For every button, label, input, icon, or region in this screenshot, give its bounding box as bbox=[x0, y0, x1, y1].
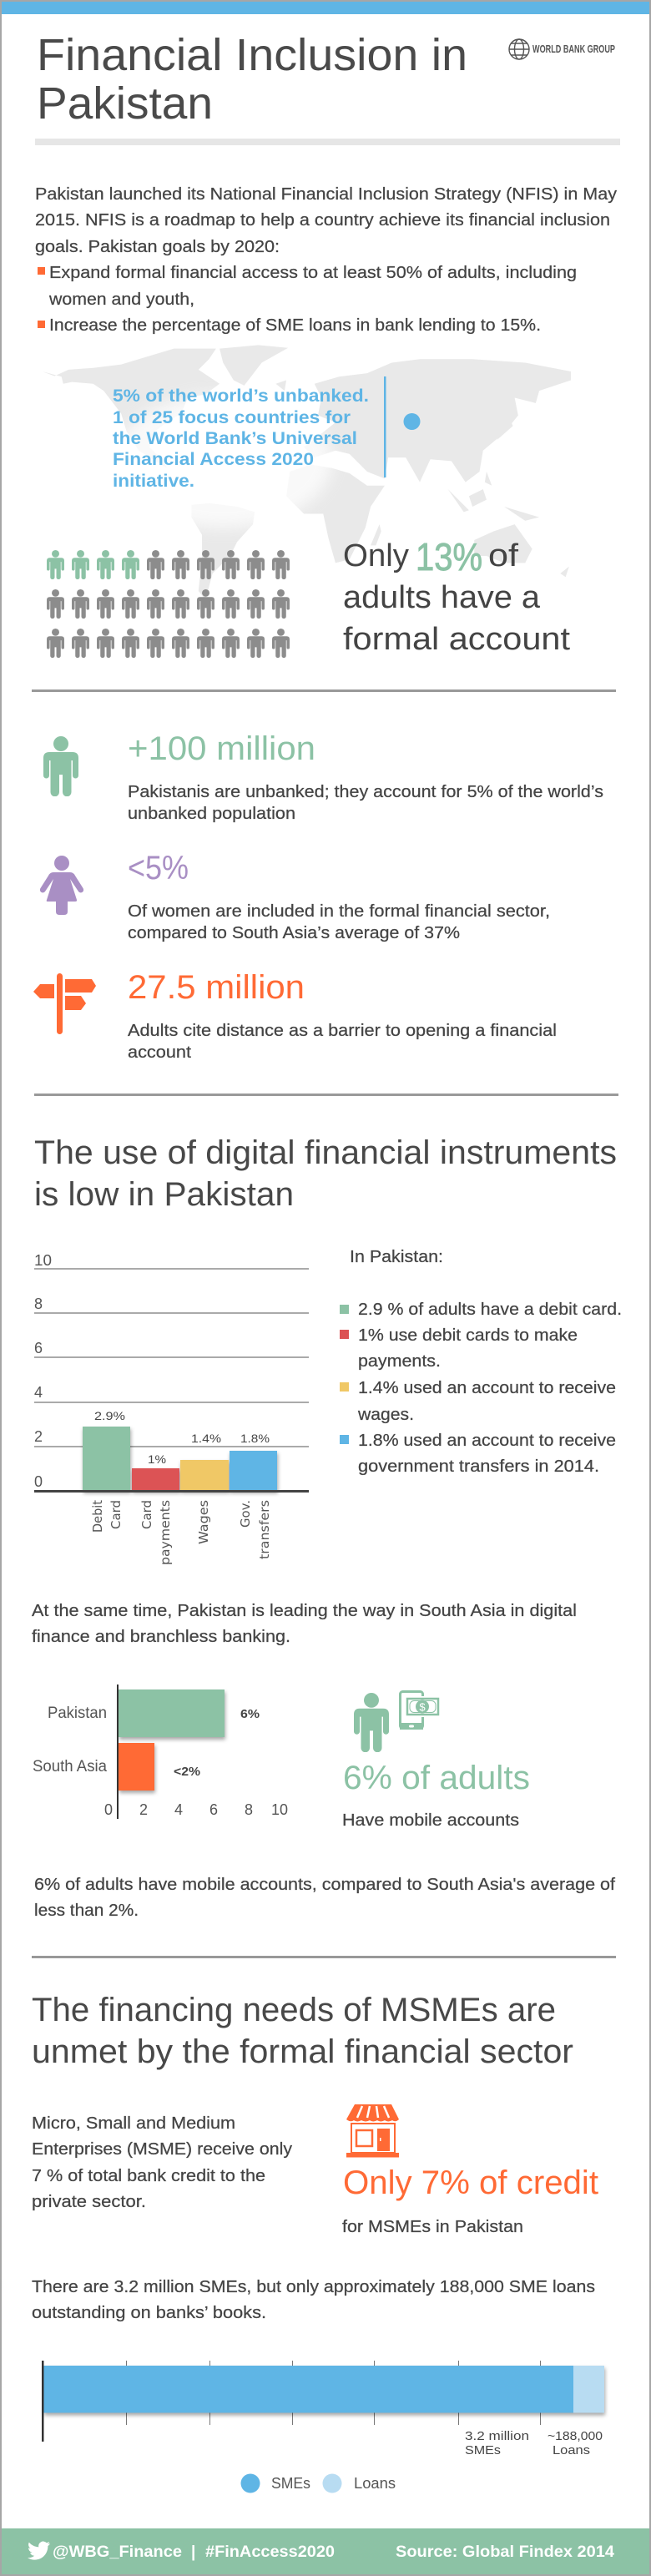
bar chart: mobile accounts: 2 bbox=[139, 1801, 148, 1818]
title: Financial Inclusion in bbox=[37, 30, 467, 80]
text: mobile comparison: 6% of adults have mobile accounts, compared to South Asia's average of bbox=[34, 1876, 615, 1894]
legend: in Pakistan: payments. bbox=[358, 1352, 441, 1371]
stat: only 13 percent: adults have a bbox=[343, 580, 541, 615]
callout: world's unbanked: 5% of the world’s unbanked. bbox=[113, 386, 369, 406]
heading: digital instruments: The use of digital financial instruments bbox=[34, 1134, 617, 1171]
legend: SMEs and loans: Loans bbox=[354, 2475, 396, 2492]
text: MSME credit: Micro, Small and Medium bbox=[32, 2114, 235, 2133]
legend: in Pakistan: 2.9 % of adults have a debit card. bbox=[358, 1301, 622, 1319]
intro text block: Pakistan launched its National Financial Inclusion Strategy (NFIS) in May bbox=[35, 185, 617, 204]
stacked bar: SMEs vs loans: 3.2 million bbox=[465, 2429, 529, 2443]
bar chart: digital instruments: 1.8% bbox=[240, 1432, 270, 1445]
callout: world's unbanked: initiative. bbox=[113, 472, 194, 491]
stat: 100 million: +100 million bbox=[128, 730, 315, 767]
bar chart: digital instruments: 8 bbox=[34, 1296, 43, 1312]
stat: 100 million: Pakistanis are unbanked; they account for 5% of the world’s bbox=[128, 783, 603, 801]
stat: only 7 percent of credit: Only 7% of credit bbox=[343, 2164, 598, 2201]
icon: man bbox=[43, 736, 78, 796]
text: mobile comparison: less than 2%. bbox=[34, 1902, 139, 1920]
bar chart: mobile accounts: 10 bbox=[271, 1801, 288, 1818]
icon: person with mobile money: $ bbox=[419, 1701, 426, 1713]
legend: in Pakistan: wages. bbox=[357, 1406, 414, 1424]
stacked bar: SMEs vs loans: ~188,000 bbox=[548, 2429, 603, 2443]
intro text block: 2015. NFIS is a roadmap to help a country achieve its financial inclusion bbox=[35, 211, 610, 230]
bar chart: digital instruments: Debit bbox=[90, 1500, 105, 1533]
bar chart: digital instruments: 10 bbox=[34, 1252, 52, 1269]
footer band bbox=[2, 2528, 649, 2574]
legend: in Pakistan: 1.4% used an account to receive bbox=[358, 1379, 616, 1397]
icon: woman bbox=[40, 856, 83, 915]
stat: 27.5 million: account bbox=[128, 1043, 191, 1062]
footer band: #FinAccess2020 bbox=[205, 2543, 335, 2561]
stat: only 13 percent: of bbox=[488, 538, 518, 573]
bar chart: mobile accounts: <2% bbox=[174, 1765, 200, 1779]
bar chart: digital instruments: 0 bbox=[34, 1473, 43, 1490]
logo: World Bank Group bbox=[509, 39, 615, 59]
stacked bar: SMEs vs loans bbox=[42, 2361, 604, 2457]
top colour band bbox=[2, 2, 649, 14]
footer band: @WBG_Finance bbox=[53, 2543, 182, 2561]
legend: in Pakistan: government transfers in 2014. bbox=[358, 1457, 599, 1476]
stat: under 5 percent bbox=[128, 850, 550, 942]
intro text block: Expand formal financial access to at least 50% of adults, including bbox=[49, 264, 577, 282]
icon: signpost bbox=[33, 973, 96, 1034]
heading: digital instruments: is low in Pakistan bbox=[34, 1176, 294, 1213]
callout: world's unbanked: 1 of 25 focus countries for bbox=[113, 408, 351, 427]
stat: 27.5 million: Adults cite distance as a barrier to opening a financial bbox=[128, 1022, 557, 1040]
icon grid: 13 percent of adults bbox=[47, 550, 290, 658]
text: digital finance lead: finance and branchless banking. bbox=[32, 1628, 290, 1646]
text: SMEs and loans: outstanding on banks’ books. bbox=[32, 2304, 266, 2322]
stat: 100 million bbox=[128, 730, 603, 823]
text: digital finance lead: At the same time, Pakistan is leading the way in South Asia in digital bbox=[32, 1602, 577, 1620]
bar chart: digital instruments: Gov. bbox=[238, 1500, 253, 1528]
logo: World Bank Group: WORLD BANK GROUP bbox=[532, 43, 615, 55]
legend: SMEs and loans: SMEs bbox=[271, 2475, 310, 2492]
stat: under 5 percent: Of women are included in the formal financial sector, bbox=[128, 902, 550, 921]
bar chart: mobile accounts: South Asia bbox=[33, 1758, 107, 1775]
stat: 6 percent of adults: 6% of adults bbox=[343, 1760, 530, 1796]
bar chart: mobile accounts: 0 bbox=[104, 1801, 113, 1818]
heading: MSME financing: unmet by the formal financial sector bbox=[32, 2033, 573, 2070]
legend: in Pakistan: In Pakistan: bbox=[350, 1248, 443, 1266]
legend: in Pakistan bbox=[340, 1248, 622, 1476]
stacked bar: SMEs vs loans: Loans bbox=[553, 2443, 590, 2457]
bar chart: digital instruments: Card bbox=[108, 1500, 124, 1529]
stat: 6 percent of adults bbox=[342, 1760, 530, 1830]
bar chart: digital instruments: 2.9% bbox=[94, 1409, 125, 1422]
intro text block: Increase the percentage of SME loans in bank lending to 15%. bbox=[49, 316, 541, 335]
intro text block: goals. Pakistan goals by 2020: bbox=[35, 238, 280, 256]
bar chart: mobile accounts: 6% bbox=[240, 1707, 260, 1721]
bar chart: mobile accounts: Pakistan bbox=[48, 1705, 107, 1722]
bar chart: digital instruments: payments bbox=[158, 1500, 173, 1565]
icon: store bbox=[346, 2104, 399, 2157]
bar chart: mobile accounts bbox=[33, 1685, 288, 1819]
stat: under 5 percent: compared to South Asia’s average of 37% bbox=[128, 924, 460, 942]
legend: in Pakistan: 1% use debit cards to make bbox=[358, 1326, 578, 1345]
bar chart: digital instruments: 4 bbox=[34, 1384, 43, 1401]
heading: MSME financing bbox=[32, 1992, 573, 2070]
world map bbox=[43, 345, 571, 600]
stat: 27.5 million bbox=[128, 969, 557, 1062]
stat: only 13 percent: formal account bbox=[343, 622, 570, 657]
bar chart: mobile accounts: 6 bbox=[209, 1801, 218, 1818]
stat: 27.5 million: 27.5 million bbox=[128, 969, 305, 1006]
text: mobile comparison bbox=[34, 1876, 615, 1920]
bar chart: digital instruments: 2 bbox=[34, 1428, 43, 1445]
bar chart: digital instruments: 1.4% bbox=[191, 1432, 221, 1445]
bar chart: digital instruments: transfers bbox=[257, 1500, 272, 1559]
bar chart: digital instruments: 6 bbox=[34, 1340, 43, 1356]
title bbox=[37, 30, 467, 129]
bar chart: digital instruments: 1% bbox=[148, 1452, 166, 1466]
footer band: Source: Global Findex 2014 bbox=[396, 2543, 614, 2561]
heading: digital instruments bbox=[34, 1134, 617, 1213]
stat: 6 percent of adults: Have mobile accounts bbox=[342, 1811, 519, 1830]
bar chart: digital instruments: Wages bbox=[196, 1500, 211, 1544]
stacked bar: SMEs vs loans: SMEs bbox=[465, 2443, 501, 2457]
text: MSME credit: Enterprises (MSME) receive only bbox=[32, 2140, 292, 2159]
legend: in Pakistan: 1.8% used an account to receive bbox=[358, 1432, 616, 1450]
text: MSME credit: 7 % of total bank credit to the bbox=[32, 2167, 265, 2185]
stat: only 13 percent: 13% bbox=[416, 535, 482, 578]
callout: world's unbanked bbox=[113, 386, 369, 491]
text: SMEs and loans: There are 3.2 million SMEs, but only approximately 188,000 SME loans bbox=[32, 2278, 595, 2296]
intro text block: women and youth, bbox=[48, 290, 194, 309]
legend: SMEs and loans bbox=[240, 2474, 396, 2493]
text: SMEs and loans bbox=[32, 2278, 595, 2322]
bar chart: digital instruments: Card bbox=[139, 1500, 154, 1529]
bar chart: mobile accounts: 4 bbox=[174, 1801, 183, 1818]
pointer line and Pakistan dot bbox=[384, 376, 421, 477]
icon: person with mobile money bbox=[354, 1691, 441, 1752]
bar chart: mobile accounts: 8 bbox=[245, 1801, 253, 1818]
text: digital finance lead bbox=[32, 1602, 577, 1646]
heading: MSME financing: The financing needs of MSMEs are bbox=[32, 1992, 556, 2028]
footer band: | bbox=[191, 2543, 195, 2561]
title: Pakistan bbox=[37, 78, 213, 129]
intro text block bbox=[35, 185, 617, 335]
stat: only 13 percent bbox=[343, 535, 570, 657]
stat: under 5 percent: <5% bbox=[128, 850, 189, 886]
callout: world's unbanked: the World Bank’s Universal bbox=[113, 429, 357, 448]
stat: only 7 percent of credit bbox=[342, 2164, 598, 2236]
stat: 100 million: unbanked population bbox=[128, 805, 295, 823]
text: MSME credit: private sector. bbox=[32, 2193, 146, 2211]
stat: only 7 percent of credit: for MSMEs in Pakistan bbox=[342, 2218, 523, 2236]
stat: only 13 percent: Only bbox=[343, 538, 409, 573]
bar chart: digital instruments bbox=[34, 1252, 309, 1565]
text: MSME credit bbox=[32, 2114, 292, 2211]
callout: world's unbanked: Financial Access 2020 bbox=[113, 450, 314, 469]
